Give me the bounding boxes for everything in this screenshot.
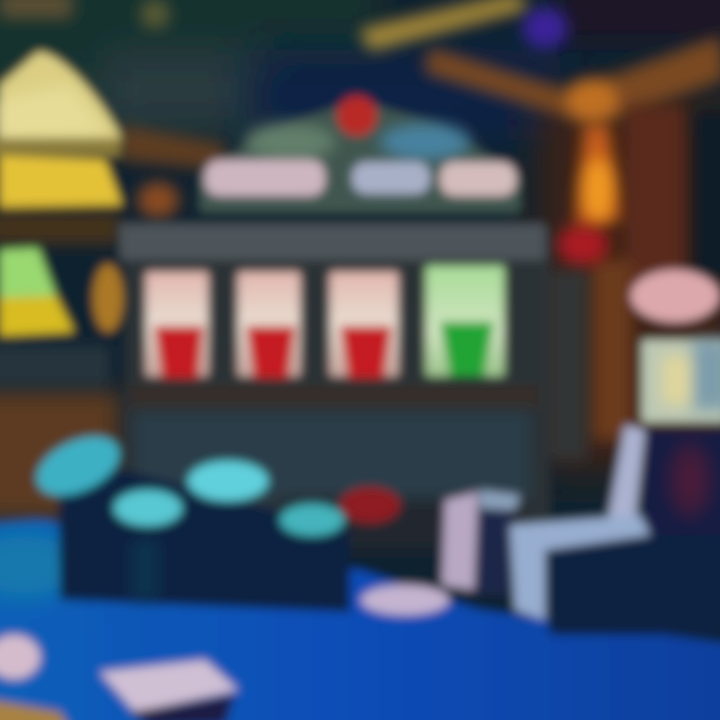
chip tops [28,425,344,536]
icon: red ball on crown [337,96,377,136]
stack of chips left [28,425,400,612]
reel 4 [426,266,504,376]
background: casino interior [0,0,720,520]
stack of chips right [361,425,720,635]
blue table [0,520,720,720]
icon: hanging orange ornament [558,80,620,265]
right lamp and screen [631,270,720,422]
reel 1 [146,272,208,378]
reel 3 [330,272,398,378]
wooden ceiling beams [0,0,720,170]
left yellow lamp [0,52,122,244]
marquee lights [205,160,516,196]
wooden column right [592,105,720,440]
left green lamp [0,183,178,385]
slot machine cabinet [120,224,588,550]
slot reels [146,266,504,378]
table highlight [0,530,85,600]
reel 2 [238,272,300,378]
playing cards on table [0,635,238,720]
slot machine crown [200,96,520,212]
